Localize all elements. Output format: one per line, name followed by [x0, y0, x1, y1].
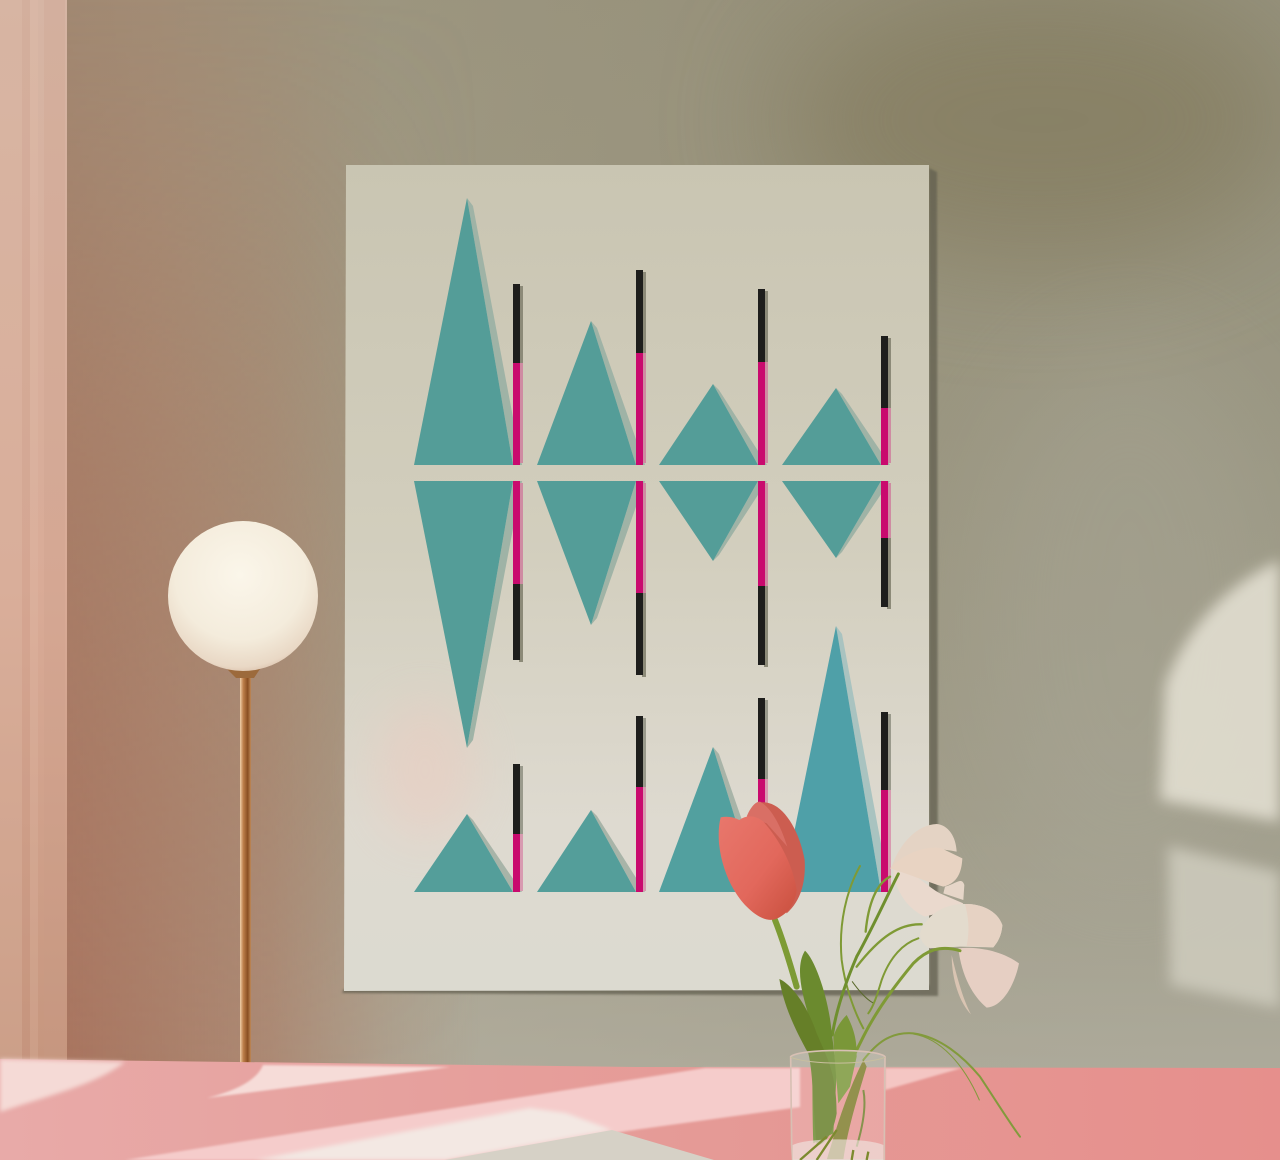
- lamp globe: [168, 521, 318, 671]
- top row of triangles and bars: [414, 198, 891, 465]
- magenta bar segments: [513, 481, 888, 593]
- green leaves: [779, 951, 867, 1160]
- triangles: [414, 481, 881, 748]
- red tulip: [719, 802, 805, 920]
- black bar segments: [513, 698, 888, 834]
- triangles: [414, 198, 881, 465]
- black bar segments: [513, 538, 888, 675]
- bar shadows: [519, 483, 891, 593]
- glass rim: [791, 1057, 885, 1063]
- curtain: [0, 0, 67, 1062]
- magenta bar segments: [513, 353, 888, 465]
- white sheet on table: [445, 1130, 714, 1160]
- lamp pole: [240, 678, 251, 1064]
- bottom row of triangles and bars: [414, 626, 891, 892]
- glass: [791, 1050, 885, 1160]
- triangles: [414, 626, 881, 892]
- stems in water: [800, 1130, 868, 1160]
- water: [793, 1139, 883, 1160]
- triangle shadows: [467, 481, 890, 748]
- pink light on poster: [375, 700, 475, 840]
- poster shadow: [342, 168, 938, 996]
- sunlight patches on wall: [1160, 560, 1280, 1008]
- green stems: [775, 866, 1020, 1137]
- flower vase: [719, 802, 1020, 1160]
- black bar segments: [513, 270, 888, 408]
- floor lamp: [168, 521, 318, 1064]
- triangle shadows: [467, 626, 890, 892]
- white flowers: [890, 824, 1019, 1014]
- middle mirrored row of triangles and bars: [414, 481, 891, 748]
- bar shadows: [519, 700, 891, 834]
- lamp neck: [224, 666, 262, 678]
- sunlight streaks on table: [0, 1059, 125, 1112]
- poster: [344, 165, 929, 991]
- bar shadows: [519, 272, 891, 409]
- triangle shadows: [467, 198, 890, 465]
- pink table: [0, 1059, 1280, 1160]
- magenta bar segments: [513, 779, 888, 892]
